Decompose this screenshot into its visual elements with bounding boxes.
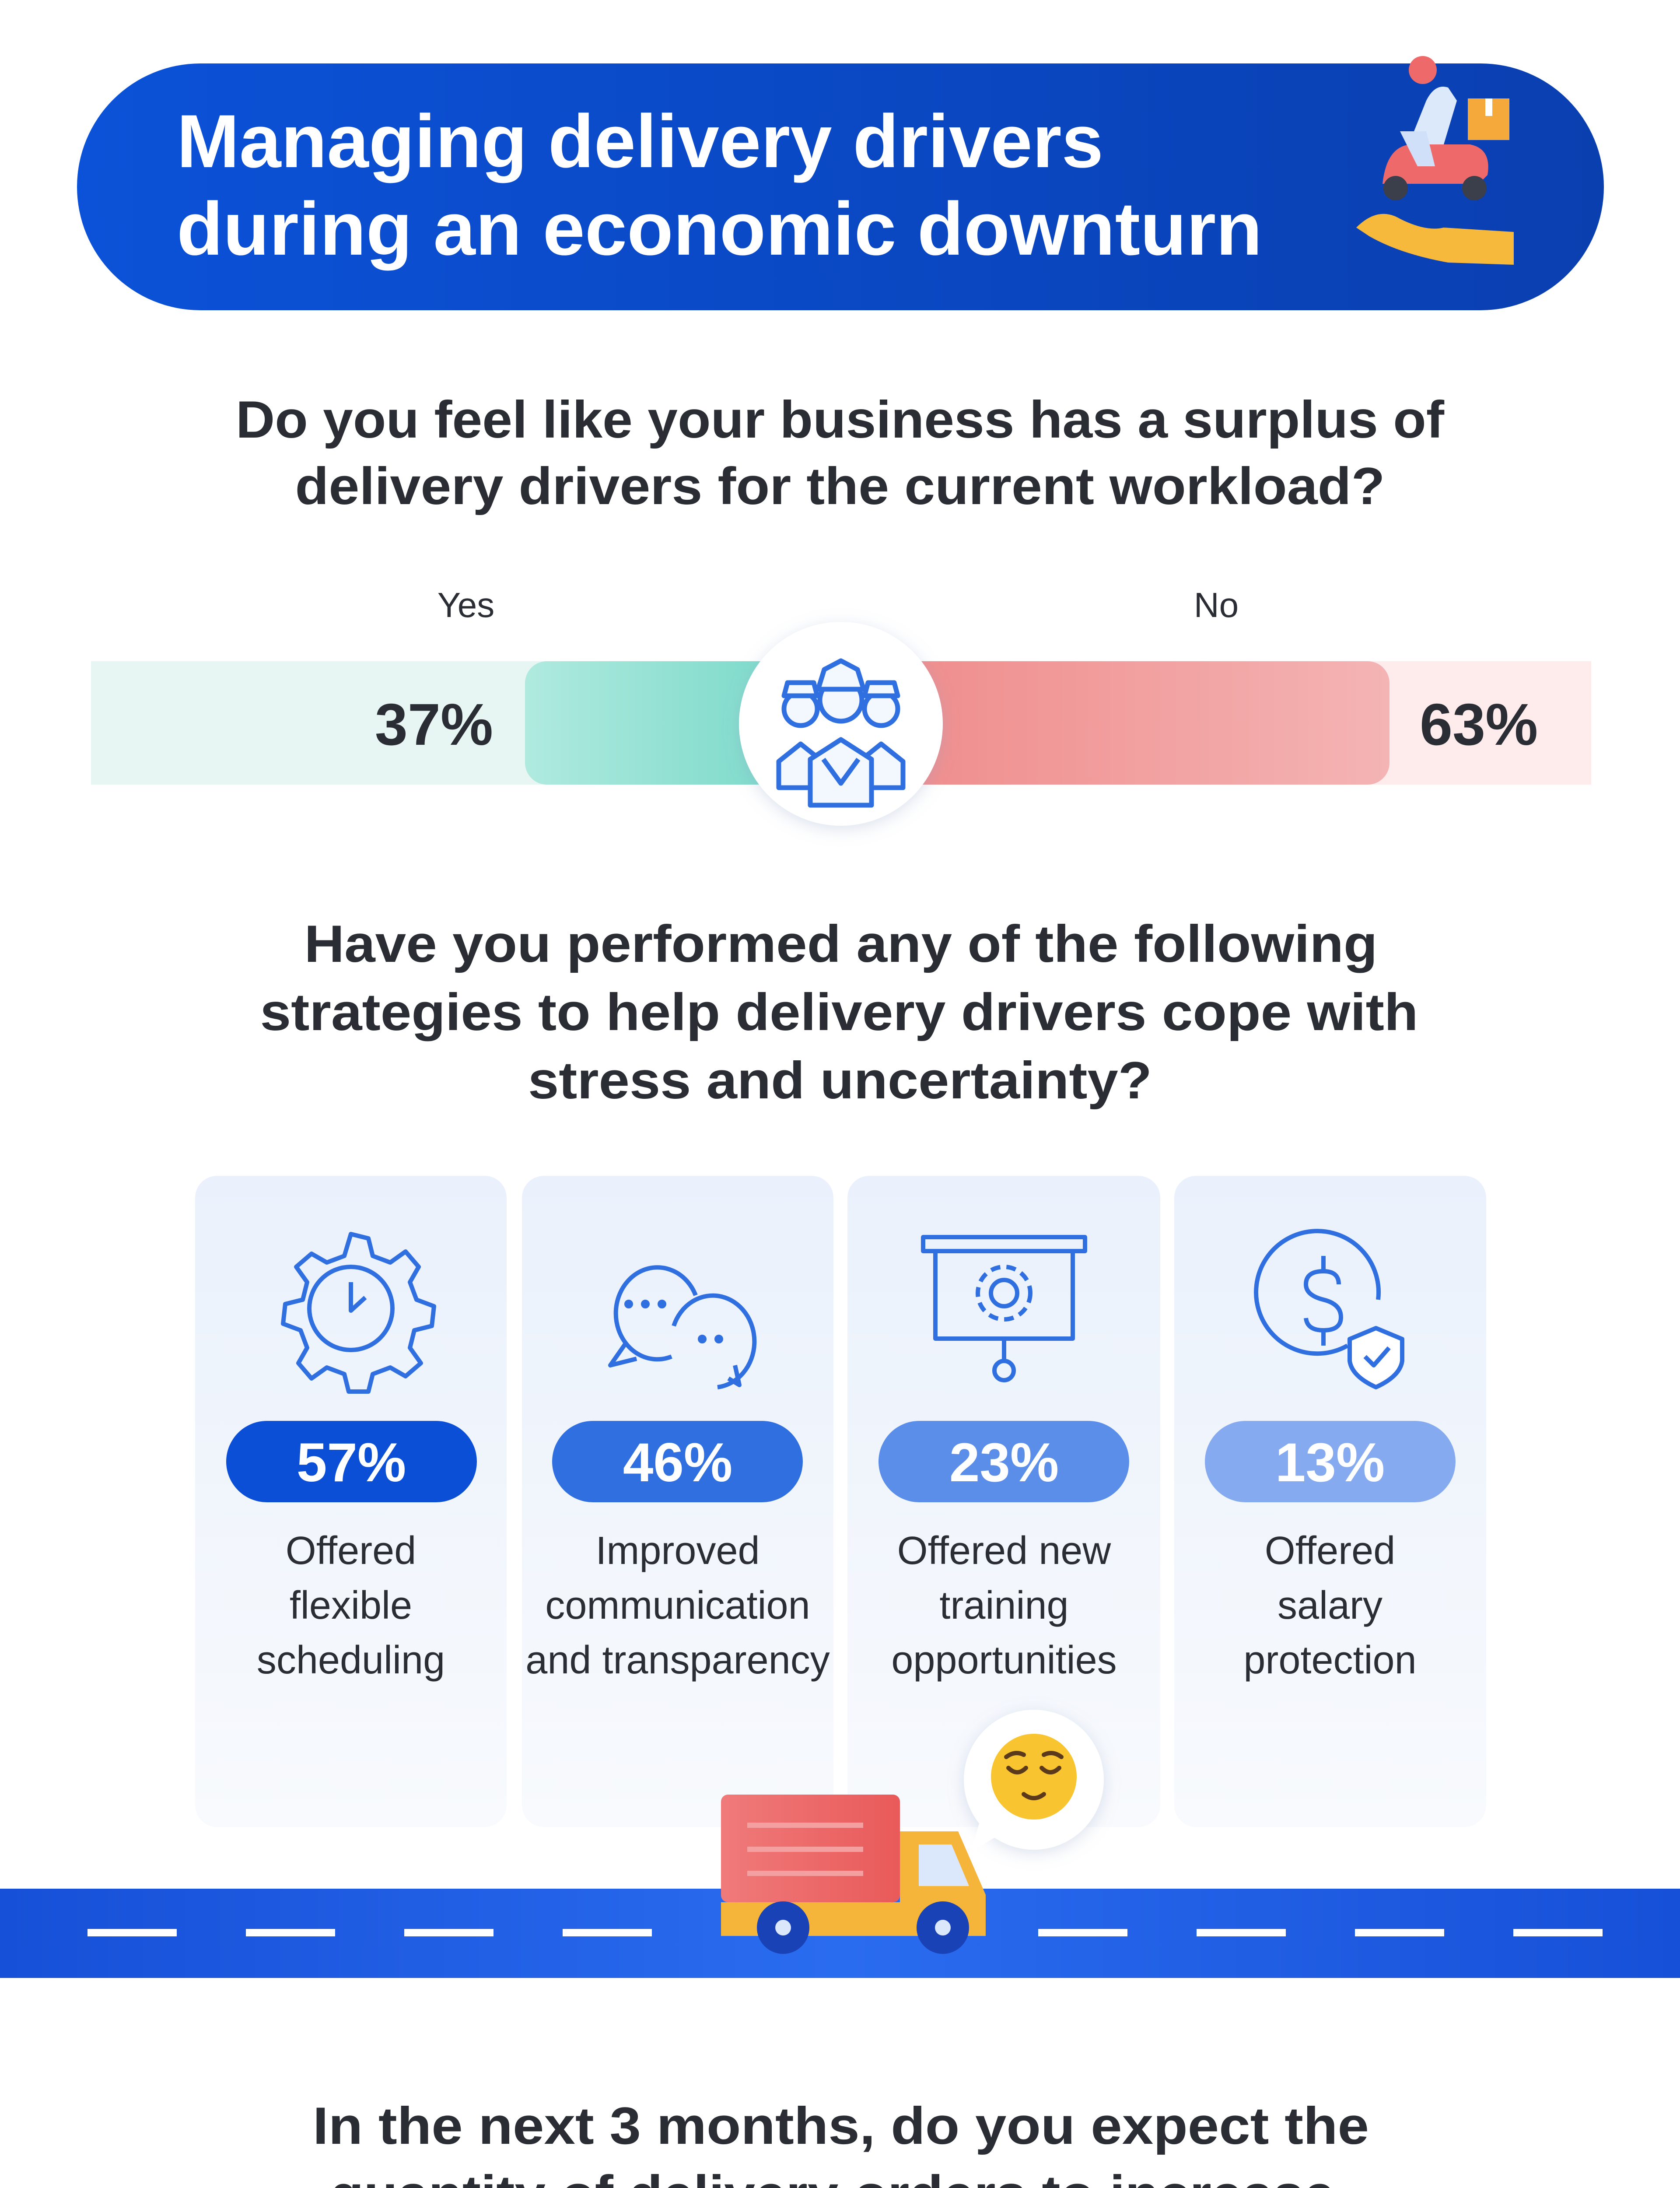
title text: Managing delivery drivers — [177, 99, 1103, 183]
pill 46% — [552, 1421, 803, 1502]
panel: training — [847, 1176, 1160, 1827]
label: scheduling — [257, 1638, 445, 1682]
question 3 heading — [313, 2097, 1369, 2188]
label: Offered — [1265, 1529, 1395, 1573]
label: Improved — [595, 1529, 760, 1573]
panel: flexible scheduling — [195, 1176, 507, 1827]
question 1 heading: delivery drivers for the current workload? — [295, 457, 1385, 515]
label: no: No — [1194, 586, 1239, 624]
icon: scooter rider and hand — [1356, 56, 1514, 265]
pill 23% — [878, 1421, 1129, 1502]
panel: salary protection — [1174, 1176, 1486, 1827]
icon: drivers group — [739, 622, 943, 826]
label: salary — [1278, 1584, 1382, 1627]
icon: gear clock — [283, 1234, 434, 1392]
icon: delivery truck — [721, 1795, 986, 1954]
value 63%: 63% — [1420, 691, 1538, 757]
yes/no bar chart — [91, 586, 1591, 826]
panel: communication: 46% — [623, 1432, 732, 1493]
panel: training: 23% — [949, 1432, 1059, 1493]
label — [1243, 1529, 1417, 1682]
label: flexible — [290, 1584, 412, 1627]
title text — [177, 99, 1262, 271]
panel: flexible scheduling: 57% — [297, 1432, 406, 1493]
panel: salary protection: 13% — [1275, 1432, 1385, 1493]
label: opportunities — [891, 1638, 1117, 1682]
road — [0, 1889, 1680, 1978]
label: yes: Yes — [438, 586, 494, 624]
title text: during an economic downturn — [177, 187, 1262, 271]
label — [891, 1529, 1117, 1682]
question 1 heading — [236, 390, 1445, 515]
pill 57% — [226, 1421, 477, 1502]
icon: relieved emoji bubble — [964, 1710, 1104, 1851]
pill 13% — [1205, 1421, 1456, 1502]
question 2 heading: strategies to help delivery drivers cope with — [260, 983, 1418, 1041]
label: protection — [1243, 1638, 1417, 1682]
icon: chat bubbles — [610, 1267, 754, 1387]
question 3 heading: In the next 3 months, do you expect the — [313, 2097, 1369, 2155]
question 2 heading: stress and uncertainty? — [528, 1051, 1152, 1110]
label: communication — [545, 1584, 810, 1627]
label: and transparency — [525, 1638, 830, 1682]
icon: presentation board — [923, 1237, 1085, 1380]
label: Offered — [286, 1529, 416, 1573]
label — [257, 1529, 445, 1682]
label: Offered new — [897, 1529, 1111, 1573]
question 1 heading: Do you feel like your business has a surplus of — [236, 390, 1445, 449]
question 2 heading — [260, 915, 1418, 1110]
question 2 heading: Have you performed any of the following — [304, 915, 1377, 973]
label — [525, 1529, 830, 1682]
value 37%: 37% — [375, 691, 493, 757]
label: training — [939, 1584, 1069, 1627]
panel: communication — [522, 1176, 833, 1827]
icon: dollar shield — [1256, 1231, 1402, 1387]
title banner — [77, 56, 1604, 310]
